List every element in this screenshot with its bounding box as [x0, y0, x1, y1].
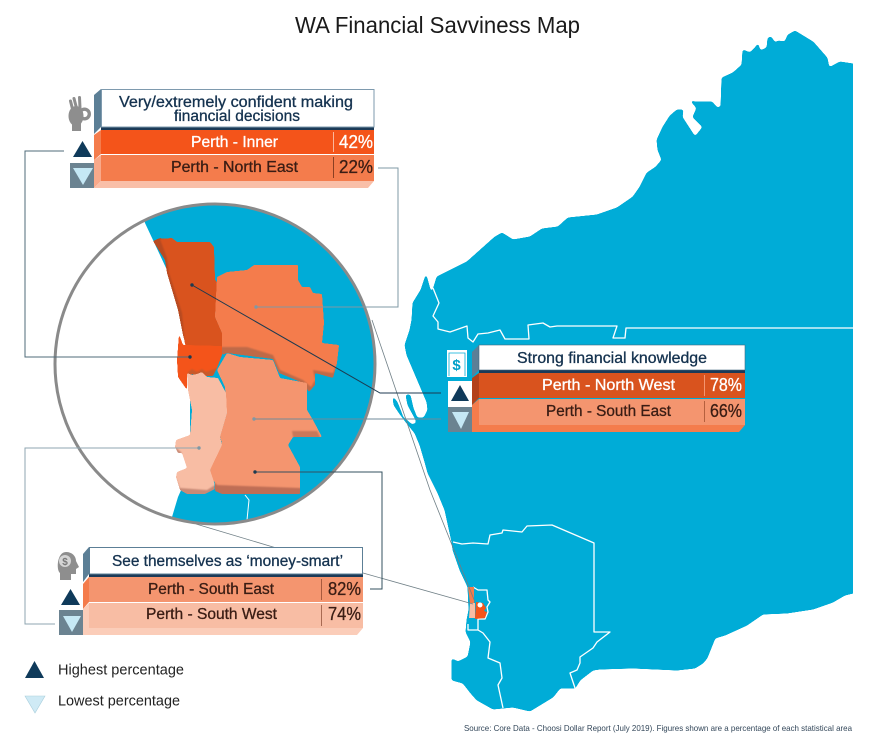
connector line: Perth North East	[256, 168, 398, 307]
icon: dollar card: $	[452, 357, 461, 374]
icon: dollar card	[447, 350, 467, 377]
heading: Very/extremely confident making	[119, 94, 353, 111]
icon: lowest marker	[59, 610, 83, 635]
row: Perth - North East 22%: 22%	[339, 157, 373, 177]
Perth metro regions on the map	[468, 587, 487, 619]
row: Perth - North East 22%: Perth - North East	[171, 159, 299, 176]
heading: See themselves as ‘money-smart’	[112, 553, 343, 570]
region: Perth - North East	[215, 265, 339, 392]
icon: highest marker	[73, 141, 92, 157]
icon: lowest marker	[448, 407, 472, 432]
region: Perth - Inner	[177, 334, 222, 390]
row: Perth - North East 22%	[101, 155, 374, 181]
row: Perth - South East 82%	[89, 577, 363, 602]
legend: highest percentage: Highest percentage	[58, 662, 184, 678]
connector line: Perth South East money-smart	[255, 472, 382, 589]
row: Perth - South West 74%: 74%	[328, 604, 361, 624]
panel: very/extremely confident	[68, 89, 374, 188]
region: Perth - North West	[153, 238, 222, 347]
row: Perth - South West 74%	[89, 603, 363, 628]
region: Perth - South West	[175, 372, 227, 494]
panel: money-smart	[58, 547, 363, 635]
row: Perth - North West 78%: Perth - North West	[542, 377, 676, 394]
legend: lowest percentage	[25, 694, 180, 713]
connector line: Perth North West	[192, 285, 441, 393]
connector line: Perth South West	[25, 448, 199, 624]
connector line: Perth Inner	[25, 151, 190, 357]
row: Perth - North West 78%	[479, 373, 745, 398]
connector line: Perth South East knowledge	[254, 418, 441, 420]
icon: highest marker	[61, 589, 80, 605]
region: Perth - South East	[210, 353, 322, 494]
icon: OK hand	[68, 98, 89, 131]
regional boundaries	[433, 288, 853, 708]
heading	[479, 345, 745, 370]
data point markers	[188, 283, 258, 474]
row: Perth - South East 82%: Perth - South East	[148, 581, 275, 598]
row: Perth - Inner 42%: 42%	[339, 132, 373, 152]
row: Perth - South East 66%	[479, 399, 745, 425]
heading	[102, 90, 374, 127]
leader lines from circle to map	[196, 320, 475, 604]
row: Perth - South East 82%: 82%	[328, 579, 361, 599]
legend	[25, 661, 184, 713]
icon: lowest marker	[70, 163, 94, 188]
icon: highest marker	[448, 381, 472, 407]
title: WA Financial Savviness Map	[295, 12, 580, 38]
icon: head with dollar bulb: $	[62, 557, 68, 568]
icon: head with dollar bulb	[58, 552, 79, 580]
panel: zoomed Perth circle	[55, 204, 375, 524]
row: Perth - South West 74%: Perth - South West	[146, 606, 278, 623]
legend: lowest percentage: Lowest percentage	[58, 694, 180, 710]
heading: financial decisions	[174, 108, 300, 125]
row: Perth - North West 78%: 78%	[710, 375, 742, 395]
heading	[90, 548, 362, 574]
panel: strong financial knowledge	[447, 345, 745, 432]
row: Perth - Inner 42%: Perth - Inner	[191, 134, 278, 151]
source note: Source: Core Data - Choosi Dollar Report (July 2019). Figures shown are a percentage of each statistical area	[464, 723, 852, 733]
heading: Strong financial knowledge	[517, 350, 707, 367]
row: Perth - South East 66%: 66%	[710, 401, 742, 421]
row: Perth - South East 66%: Perth - South East	[546, 403, 672, 420]
row: Perth - Inner 42%	[101, 130, 374, 154]
map: Western Australia	[393, 31, 870, 711]
